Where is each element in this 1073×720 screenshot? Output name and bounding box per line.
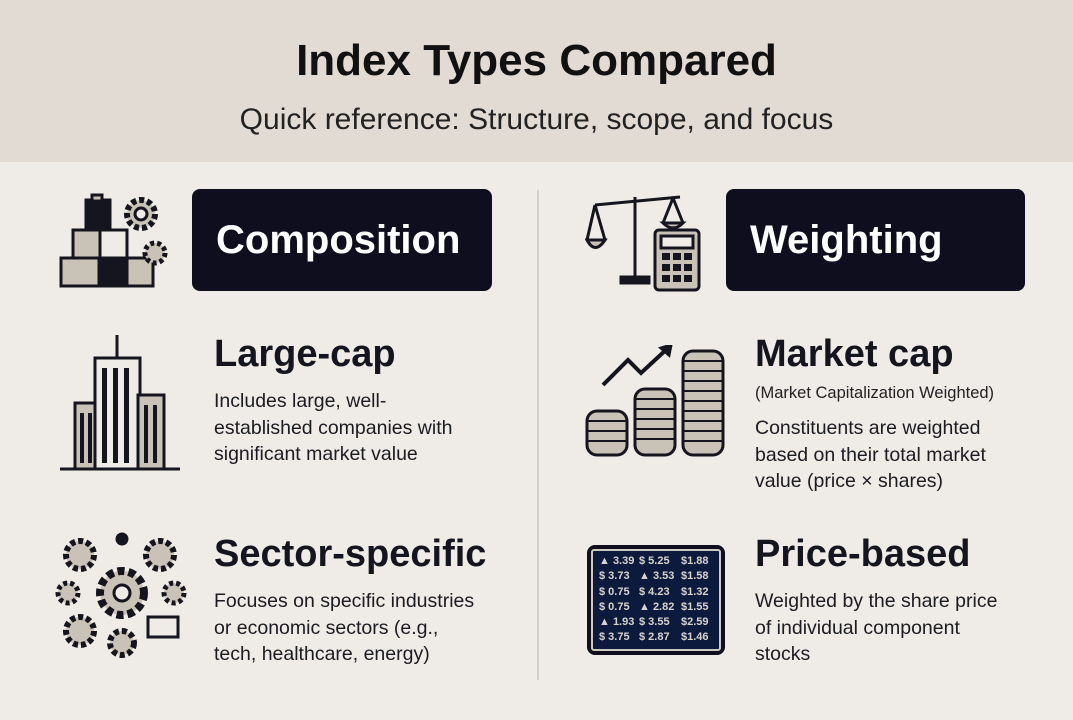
icon: price board: $ 4.23 [639,586,670,598]
icon: price board: ▲ 3.53 [639,570,674,582]
icon: price board: $ 5.25 [639,555,670,567]
icon: price board: $ 3.75 [599,631,630,643]
icon: price board: $ 0.75 [599,601,630,613]
item: Large-cap: significant market value [214,443,418,465]
icon: price board: $1.32 [681,586,709,598]
item: Large-cap: Large-cap [214,333,396,375]
item: Large-cap [214,333,452,465]
icon: skyscraper [60,335,180,470]
item: Market cap: (Market Capitalization Weighted) [755,384,994,402]
icon: price board: $1.55 [681,601,709,613]
item: Price-based: Price-based [755,533,970,575]
item: Large-cap: established companies with [214,416,452,438]
item: Market cap [755,333,994,492]
icon: gear network [56,532,186,658]
item: Market cap: value (price × shares) [755,470,943,492]
icon: coins with arrow [586,345,724,456]
icon: price board [587,545,725,655]
panel heading: Composition: Composition [216,218,460,262]
item: Market cap: based on their total market [755,444,986,466]
icon: blocks and gears [60,194,168,288]
header band [0,0,1073,162]
icon: price board: $ 0.75 [599,586,630,598]
item: Sector-specific: tech, healthcare, energy) [214,643,430,665]
item: Large-cap: Includes large, well- [214,390,386,412]
icon: price board: $ 3.73 [599,570,630,582]
icon: price board: $1.88 [681,555,709,567]
icon: price board: $1.58 [681,570,709,582]
item: Market cap: Market cap [755,333,954,375]
item: Price-based: stocks [755,643,810,665]
icon: price board: ▲ 1.93 [599,616,634,628]
icon: price board: $2.59 [681,616,709,628]
subtitle: Quick reference: Structure, scope, and focus [240,103,833,136]
item: Price-based: Weighted by the share price [755,590,997,612]
item: Sector-specific [214,533,486,665]
panel heading: Weighting: Weighting [750,218,943,262]
icon: price board: $1.46 [681,631,709,643]
icon: price board: ▲ 3.39 [599,555,634,567]
item: Sector-specific: or economic sectors (e.g., [214,616,438,638]
title: Index Types Compared [296,36,777,85]
item: Price-based: of individual component [755,616,960,638]
panel heading: Composition [192,189,492,291]
icon: price board: ▲ 2.82 [639,601,674,613]
icon: price board: $ 2.87 [639,631,670,643]
panel heading: Weighting [726,189,1025,291]
icon: scale and calculator [585,196,700,292]
icon: price board: $ 3.55 [639,616,670,628]
item: Sector-specific: Focuses on specific industries [214,590,474,612]
item: Price-based [755,533,997,665]
item: Sector-specific: Sector-specific [214,533,486,575]
item: Market cap: Constituents are weighted [755,417,980,439]
